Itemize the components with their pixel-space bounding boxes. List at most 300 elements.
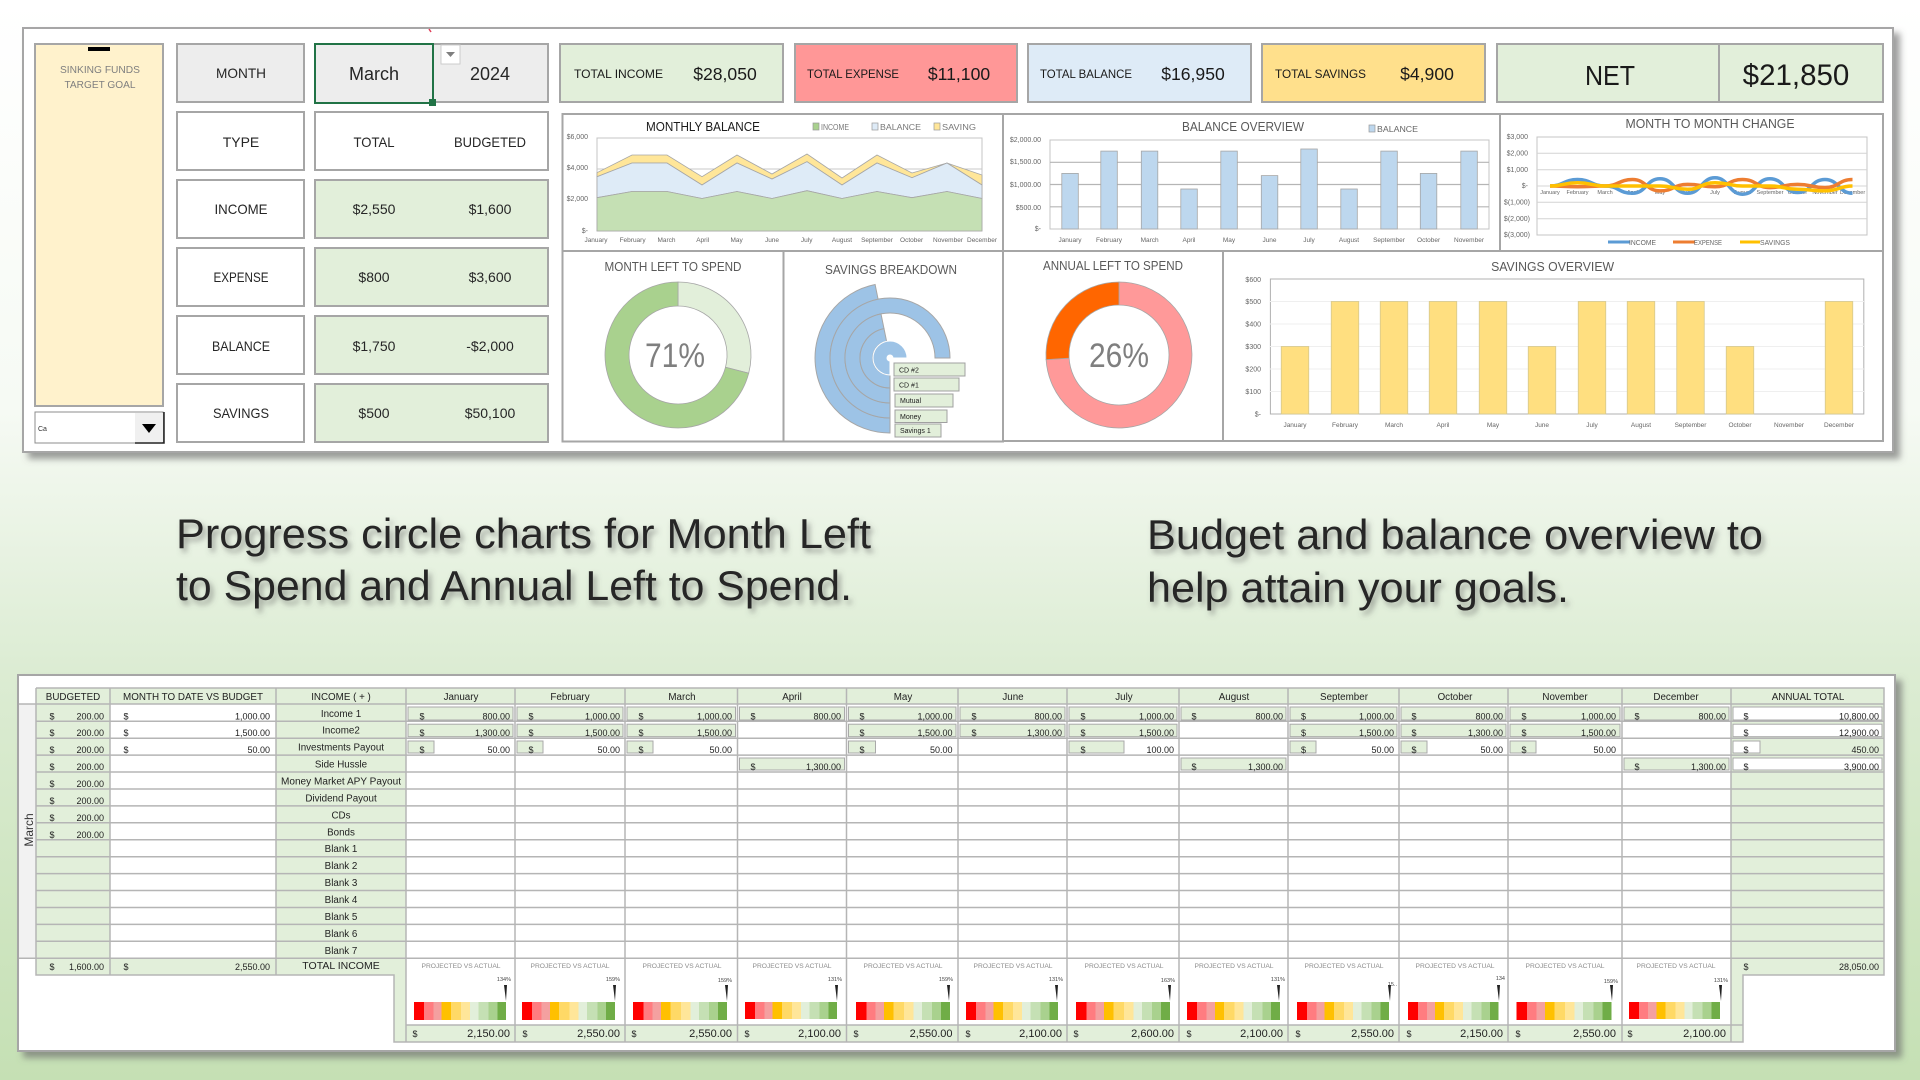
column: income categories: Blank 7 — [325, 946, 357, 957]
row: type: TOTAL — [354, 134, 395, 150]
gauge: January: $ — [412, 1029, 418, 1039]
kpi: total savings: $4,900 — [1400, 64, 1454, 84]
chart: balance overview: $1,500.00 — [1010, 159, 1041, 166]
column: January: $ — [419, 728, 425, 738]
gauge: December: 2,100.00 — [1683, 1028, 1726, 1040]
kpi: net: $21,850 — [1743, 59, 1849, 92]
column: budgeted: $ — [49, 728, 55, 738]
labels text: savings categories: Mutual — [900, 398, 921, 405]
chart: month to month change: $3,000 — [1507, 134, 1528, 141]
gauge: November: $ — [1515, 1029, 1521, 1039]
gauge: November: 2,550.00 — [1573, 1028, 1616, 1040]
column: November: 1,000.00 — [1581, 711, 1616, 721]
gauge: May: $ — [853, 1029, 859, 1039]
gauge: September: PROJECTED VS ACTUAL — [1304, 963, 1384, 970]
row: income: $1,600 — [469, 201, 512, 217]
column: budgeted: $ — [49, 796, 55, 806]
row: expense: $3,600 — [469, 269, 512, 285]
chart: month to month change: April — [1627, 190, 1638, 196]
chart: balance overview: BALANCE OVERVIEW — [1182, 119, 1305, 134]
chart: savings overview: November — [1774, 422, 1805, 429]
column: budgeted: $ — [49, 711, 55, 721]
labels text: savings categories: CD #1 — [899, 382, 919, 390]
column: January: $ — [419, 711, 425, 721]
chart: month to month change: MONTH TO MONTH CHANGE — [1626, 116, 1795, 131]
chart: month left to spend: 71% — [645, 337, 705, 375]
column: annual total: 28,050.00 — [1839, 962, 1879, 972]
gauge: October: 2,150.00 — [1460, 1028, 1503, 1040]
legend: balance: BALANCE — [1377, 124, 1418, 134]
panel: dashboard — [23, 28, 1893, 452]
table backgrounds — [36, 688, 1884, 1042]
chart: savings overview: August — [1631, 422, 1651, 429]
table header: January — [444, 692, 479, 703]
chart: savings breakdown: SAVINGS BREAKDOWN — [825, 262, 957, 277]
text block: budget and balance overview: help attain your goals. — [1147, 564, 1569, 611]
gauge: September: 15.. — [1388, 982, 1397, 988]
legend: line series: SAVINGS — [1760, 238, 1790, 247]
chart: savings overview: $200 — [1245, 366, 1261, 374]
column: budgeted: 200.00 — [76, 796, 104, 806]
gauge: August: 2,100.00 — [1240, 1028, 1283, 1040]
column: income categories: Income2 — [322, 726, 360, 737]
chart: balance overview: $500.00 — [1016, 205, 1041, 212]
column: August: $ — [1191, 762, 1197, 772]
chart: month to month change: December — [1840, 190, 1865, 196]
gauge: February: PROJECTED VS ACTUAL — [530, 963, 610, 970]
row: month: 2024 — [470, 64, 510, 84]
chart: savings overview: March — [1385, 422, 1403, 429]
table grid — [19, 688, 1884, 1042]
column: income categories: Investments Payout — [298, 743, 384, 754]
row: type: TYPE — [223, 134, 259, 150]
text block: budget and balance overview — [1147, 511, 1763, 611]
chart: balance overview: July — [1303, 237, 1316, 244]
gauge: August — [1186, 963, 1285, 1040]
column: budgeted: $ — [49, 962, 55, 972]
column: May: $ — [859, 745, 865, 755]
chart: annual left to spend: 26% — [1089, 337, 1149, 375]
chart: savings overview: $600 — [1245, 277, 1261, 284]
column: July — [1069, 707, 1177, 755]
column: March: 1,000.00 — [697, 711, 732, 721]
gauge: July: 2,600.00 — [1131, 1028, 1174, 1040]
gauge: July — [1073, 963, 1175, 1040]
column: budgeted: $ — [49, 745, 55, 755]
row: type: BUDGETED — [454, 134, 526, 150]
gauge: April: 2,100.00 — [798, 1028, 841, 1040]
gauge: March: 2,550.00 — [689, 1028, 732, 1040]
chart: savings overview — [1223, 251, 1883, 441]
chart: savings overview: September — [1675, 422, 1707, 429]
column: July: $ — [1080, 745, 1086, 755]
gauge: February: 2,550.00 — [577, 1028, 620, 1040]
column: month to date: $ — [123, 745, 129, 755]
kpi: total expense: TOTAL EXPENSE — [807, 67, 899, 81]
chart: monthly balance — [562, 114, 1003, 251]
chart: month to month change — [1500, 114, 1883, 251]
column: June — [960, 707, 1065, 738]
chart: savings overview: January — [1283, 422, 1307, 429]
column: July: 100.00 — [1146, 745, 1174, 755]
column: September: $ — [1301, 728, 1306, 738]
gauge: June: PROJECTED VS ACTUAL — [974, 963, 1053, 970]
column: January: 50.00 — [487, 745, 510, 755]
column: budgeted: $ — [49, 779, 55, 789]
gauge: September: $ — [1295, 1029, 1301, 1039]
column: annual total: 450.00 — [1851, 745, 1879, 755]
chart: month to month change: January — [1540, 190, 1560, 196]
table header: April — [782, 692, 802, 703]
chart: savings overview: February — [1332, 422, 1359, 429]
gauge: January: 2,150.00 — [467, 1028, 510, 1040]
labels text: savings categories — [899, 368, 931, 435]
column: income categories: Blank 3 — [325, 878, 358, 889]
chart: monthly balance: December — [967, 237, 998, 244]
column: March: $ — [638, 711, 644, 721]
column: September: 1,000.00 — [1359, 711, 1394, 721]
column: annual total — [1733, 707, 1882, 972]
gauge: February — [522, 963, 620, 1040]
chart: balance overview: May — [1223, 237, 1236, 244]
chart: monthly balance: MONTHLY BALANCE — [646, 119, 760, 134]
column: November: $ — [1521, 728, 1527, 738]
column: September: $ — [1301, 745, 1306, 755]
column: income categories: Blank 6 — [325, 929, 358, 940]
column: month to date: 2,550.00 — [235, 962, 270, 972]
table header: August — [1219, 692, 1250, 703]
gauge: April: 131% — [828, 977, 842, 983]
chart: monthly balance: March — [657, 237, 676, 244]
chart: balance overview: November — [1454, 237, 1485, 244]
column: July: 1,500.00 — [1139, 728, 1174, 738]
column: October: $ — [1411, 711, 1417, 721]
kpi: net — [1497, 44, 1883, 102]
chart: month to month change: February — [1566, 190, 1589, 196]
column: June: $ — [971, 711, 977, 721]
column: March: $ — [638, 745, 644, 755]
column: February: 1,500.00 — [585, 728, 620, 738]
chart: monthly balance: $4,000 — [567, 165, 588, 172]
gauge: May: 2,550.00 — [910, 1028, 952, 1040]
gauge: February: 159% — [606, 977, 620, 983]
column: budgeted: 200.00 — [76, 762, 104, 772]
column: February: $ — [528, 711, 534, 721]
column: April: 800.00 — [813, 711, 841, 721]
kpi: total income: TOTAL INCOME — [574, 67, 663, 81]
gauge: September: 2,550.00 — [1351, 1028, 1394, 1040]
panel: sinking funds target goal — [35, 44, 163, 406]
table header — [46, 692, 1845, 703]
column: September: $ — [1301, 711, 1306, 721]
column: April — [740, 707, 844, 772]
gauge: May: 159% — [939, 977, 953, 983]
column: February: $ — [528, 728, 534, 738]
chart: monthly balance: August — [832, 237, 852, 244]
column: annual total: $ — [1743, 745, 1749, 755]
column: March: $ — [638, 728, 644, 738]
gauge: August: PROJECTED VS ACTUAL — [1194, 963, 1274, 970]
table header: MONTH TO DATE VS BUDGET — [123, 692, 263, 703]
column: September — [1290, 707, 1397, 755]
column: October: 50.00 — [1480, 745, 1503, 755]
column: July: $ — [1080, 728, 1086, 738]
column: December: $ — [1634, 762, 1640, 772]
column: March: 50.00 — [709, 745, 732, 755]
column: January: 1,300.00 — [475, 728, 510, 738]
column: April: $ — [750, 711, 756, 721]
labels text: savings categories: Money — [900, 414, 922, 421]
chart: balance overview: June — [1262, 237, 1277, 244]
column: budgeted: 200.00 — [76, 779, 104, 789]
chart: balance overview: $2,000.00 — [1010, 137, 1041, 144]
column: month to date: 50.00 — [247, 745, 270, 755]
chart: balance overview: February — [1096, 237, 1123, 244]
table header: November — [1542, 692, 1588, 703]
row: expense: EXPENSE — [214, 269, 268, 285]
column: November: $ — [1521, 745, 1527, 755]
gauge: June — [965, 963, 1063, 1040]
column: annual total: $ — [1743, 711, 1749, 721]
legend: line series — [1608, 238, 1790, 247]
column: February: 1,000.00 — [585, 711, 620, 721]
chart: savings breakdown — [784, 251, 1003, 442]
gauge: October: $ — [1406, 1029, 1412, 1039]
column: January: 800.00 — [482, 711, 510, 721]
chart: balance overview — [1003, 114, 1500, 251]
gauge: March: PROJECTED VS ACTUAL — [642, 963, 722, 970]
legend: line series: INCOME — [1629, 238, 1656, 247]
column: income categories: CDs — [331, 810, 351, 821]
gauge: August: $ — [1186, 1029, 1192, 1039]
month side label: March — [22, 813, 36, 847]
panel: sinking funds target goal: TARGET GOAL — [64, 79, 136, 91]
column: May: 1,500.00 — [917, 728, 952, 738]
row: month: March — [349, 64, 399, 84]
column: November — [1510, 707, 1620, 755]
row: month: MONTH — [216, 65, 266, 81]
gauge: October: 134 — [1496, 976, 1505, 982]
column: annual total: $ — [1743, 728, 1749, 738]
column: November: 1,500.00 — [1581, 728, 1616, 738]
gauge: January: 134% — [497, 977, 511, 983]
gauge: July: $ — [1073, 1029, 1079, 1039]
column: October: 800.00 — [1475, 711, 1503, 721]
legend: line series: EXPENSE — [1694, 238, 1722, 247]
row: balance — [177, 316, 548, 374]
gauge: September — [1295, 963, 1397, 1040]
row: expense: $800 — [358, 269, 390, 285]
column: August: 1,300.00 — [1248, 762, 1283, 772]
gauge: March — [631, 963, 732, 1040]
gauge: February: $ — [522, 1029, 528, 1039]
column: June: 1,300.00 — [1027, 728, 1062, 738]
gauge: April: $ — [744, 1029, 750, 1039]
chart: monthly balance: November — [933, 237, 964, 244]
table header: December — [1653, 692, 1699, 703]
column: May: $ — [859, 711, 865, 721]
column: September: 1,500.00 — [1359, 728, 1394, 738]
gauge: May: PROJECTED VS ACTUAL — [864, 963, 943, 970]
table header: June — [1002, 692, 1024, 703]
gauge: July: 163% — [1161, 978, 1175, 984]
table header: March — [668, 692, 696, 703]
legend: monthly balance: BALANCE — [880, 122, 921, 132]
kpi: net: NET — [1585, 60, 1635, 91]
column: December: $ — [1634, 711, 1640, 721]
gauge: April — [744, 963, 842, 1040]
chart: monthly balance: June — [765, 237, 779, 244]
column: December — [1624, 707, 1729, 772]
text block: progress circle charts — [176, 510, 871, 609]
chart: balance overview: October — [1417, 237, 1441, 244]
dropdown: sinking funds selector — [35, 412, 164, 443]
column: budgeted: 200.00 — [76, 813, 104, 823]
row: income: $2,550 — [353, 201, 396, 217]
row: expense — [177, 248, 548, 306]
column: June: $ — [971, 728, 977, 738]
text block: budget and balance overview: Budget and balance overview to — [1147, 511, 1763, 558]
column: income categories: Blank 4 — [325, 895, 358, 906]
chart: savings overview: SAVINGS OVERVIEW — [1491, 259, 1615, 274]
gauge: October: PROJECTED VS ACTUAL — [1416, 963, 1495, 970]
gauge: August: 131% — [1271, 977, 1285, 983]
column: August: 800.00 — [1255, 711, 1283, 721]
column: annual total: $ — [1743, 762, 1749, 772]
column: May: $ — [859, 728, 865, 738]
column: budgeted: 200.00 — [76, 745, 104, 755]
column: budgeted: 200.00 — [76, 728, 104, 738]
gauge: March: 159% — [718, 978, 732, 984]
gauge: June: $ — [965, 1029, 971, 1039]
chart: monthly balance: $- — [582, 228, 589, 235]
month side label — [19, 704, 36, 958]
chart: annual left to spend — [1003, 251, 1223, 441]
table header: INCOME ( + ) — [311, 692, 371, 703]
chart: balance overview: April — [1182, 237, 1196, 244]
column: August — [1181, 707, 1286, 772]
gauge: December: 131% — [1714, 978, 1728, 984]
row: income — [177, 180, 548, 238]
gauge: June: 2,100.00 — [1019, 1028, 1062, 1040]
gauge: November — [1515, 963, 1618, 1040]
chart: savings overview: October — [1728, 422, 1752, 429]
labels text: savings categories: CD #2 — [899, 368, 919, 374]
chart: balance overview: August — [1339, 237, 1359, 244]
column: October: $ — [1411, 745, 1417, 755]
column: January: $ — [419, 745, 425, 755]
chart: month left to spend: MONTH LEFT TO SPEND — [604, 259, 742, 274]
column: October: $ — [1411, 728, 1417, 738]
column: annual total: 3,900.00 — [1844, 762, 1879, 772]
gauge: July: PROJECTED VS ACTUAL — [1084, 963, 1164, 970]
gauge: November: PROJECTED VS ACTUAL — [1526, 963, 1605, 970]
table header: September — [1320, 692, 1369, 703]
text block: progress circle charts: Progress circle charts for Month Left — [176, 510, 871, 557]
gauge: April: PROJECTED VS ACTUAL — [752, 963, 832, 970]
kpi: total income — [560, 44, 783, 102]
column: budgeted — [49, 711, 104, 972]
column: month to date: 1,500.00 — [235, 728, 270, 738]
row: savings: $50,100 — [465, 405, 516, 421]
column: income categories: Bonds — [327, 827, 355, 838]
chart: month to month change: $- — [1522, 183, 1529, 190]
chart: monthly balance: April — [696, 237, 710, 244]
row: month — [177, 29, 548, 106]
column: October: 1,300.00 — [1468, 728, 1503, 738]
column: January — [408, 707, 513, 755]
chart: savings overview: $500 — [1245, 299, 1261, 306]
chart: month to month change: $(1,000) — [1504, 200, 1530, 206]
chart: balance overview: September — [1373, 237, 1406, 244]
column: budgeted: 200.00 — [76, 711, 104, 721]
column: October — [1401, 707, 1506, 755]
kpi: total expense — [795, 44, 1017, 102]
kpi: total income: $28,050 — [693, 64, 757, 84]
gauge: December — [1627, 963, 1728, 1040]
column: income categories: TOTAL INCOME — [302, 960, 380, 972]
chart: month to month change: September — [1757, 190, 1784, 196]
column: income categories: Side Hussle — [315, 760, 368, 771]
row: balance: $1,750 — [353, 338, 396, 354]
column: income categories: Income 1 — [321, 709, 361, 720]
gauge: June: 131% — [1049, 977, 1063, 983]
chart: savings overview: $- — [1255, 412, 1262, 418]
panel: sinking funds target goal: SINKING FUNDS — [60, 64, 140, 76]
column: income categories: Money Market APY Payout — [281, 776, 401, 788]
row: balance: BALANCE — [212, 338, 270, 354]
chart: month to month change: November — [1812, 190, 1838, 196]
gauge: January — [412, 963, 511, 1040]
text block: progress circle charts: to Spend and Annual Left to Spend. — [176, 562, 852, 609]
column: income categories: Blank 1 — [325, 844, 357, 855]
row: income: INCOME — [214, 201, 268, 217]
table header: May — [894, 692, 912, 703]
column: July: $ — [1080, 711, 1086, 721]
column: May: 1,000.00 — [917, 711, 952, 721]
legend: monthly balance: INCOME — [821, 122, 849, 132]
chart: month to month change: June — [1682, 190, 1693, 196]
gauge: May — [853, 963, 953, 1040]
chart: savings overview: May — [1487, 422, 1500, 429]
gauge: December: PROJECTED VS ACTUAL — [1636, 963, 1716, 970]
column: budgeted: 1,600.00 — [69, 962, 104, 972]
kpi: total savings: TOTAL SAVINGS — [1275, 67, 1366, 81]
chart: savings overview: June — [1535, 422, 1549, 429]
chart: month to month change: October — [1788, 190, 1807, 196]
column: February: $ — [528, 745, 534, 755]
column: December: 1,300.00 — [1691, 762, 1726, 772]
labels text: savings categories: Savings 1 — [900, 428, 931, 435]
chart: annual left to spend: ANNUAL LEFT TO SPEND — [1043, 258, 1183, 273]
gauge: December: $ — [1627, 1029, 1633, 1039]
column: April: $ — [750, 762, 756, 772]
table header: ANNUAL TOTAL — [1772, 692, 1845, 703]
table header: July — [1115, 692, 1133, 703]
chart: balance overview: January — [1058, 237, 1082, 244]
chart: month to month change: May — [1655, 190, 1665, 196]
chart: monthly balance: October — [900, 237, 924, 244]
row: balance: -$2,000 — [466, 338, 514, 354]
row: savings: $500 — [358, 405, 390, 421]
chart: month to month change: July — [1710, 190, 1720, 196]
column: February: 50.00 — [597, 745, 620, 755]
column: May: 50.00 — [930, 745, 952, 755]
column: budgeted: $ — [49, 813, 55, 823]
gauge: January: PROJECTED VS ACTUAL — [422, 963, 501, 970]
column: annual total: 10,800.00 — [1839, 711, 1879, 721]
column: February — [517, 707, 623, 755]
